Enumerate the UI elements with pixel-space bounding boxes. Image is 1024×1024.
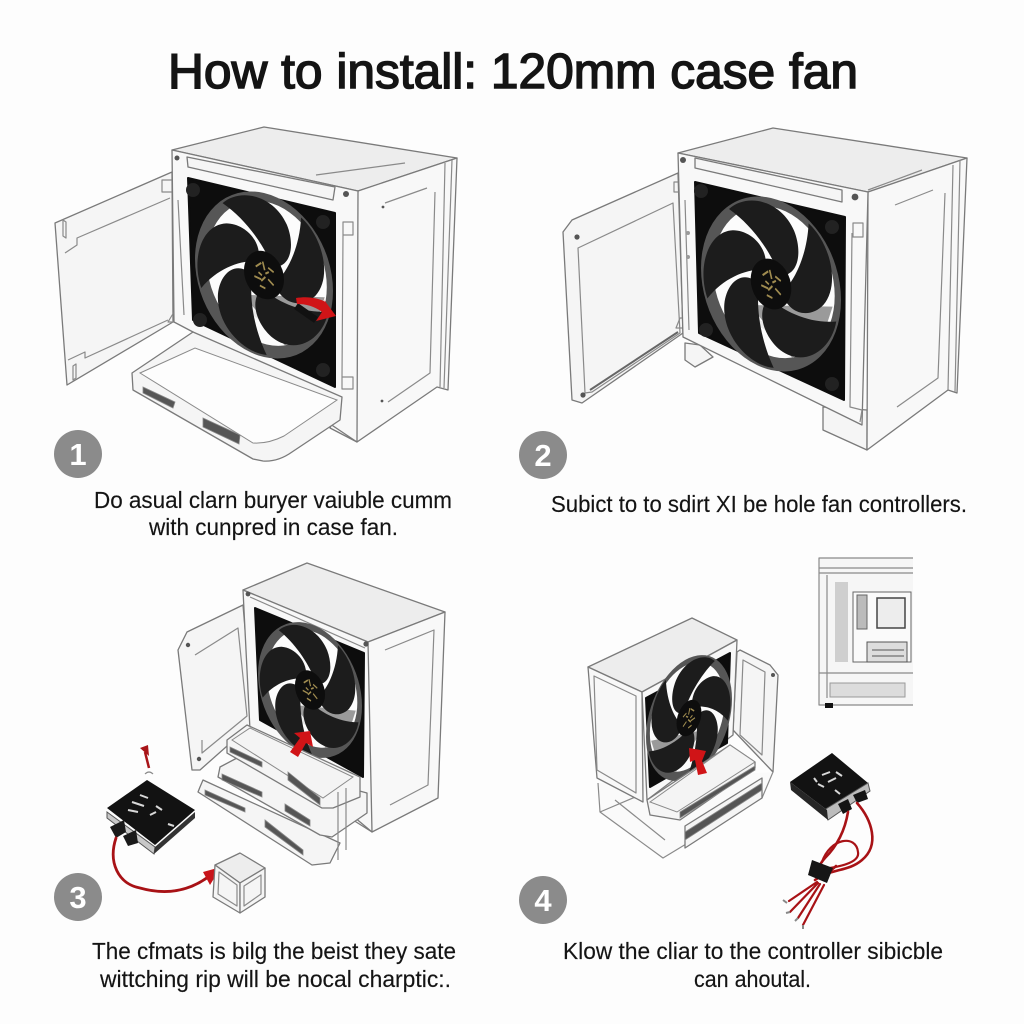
door, step 2 xyxy=(563,173,688,403)
title: How to install: 120mm case fan xyxy=(168,45,858,99)
step 1 caption xyxy=(94,487,452,540)
step 3 caption: wittching rip will be nocal charptic:. xyxy=(99,966,451,992)
step 4 badge: 4 xyxy=(534,883,552,918)
controller module, step 3 xyxy=(107,780,195,854)
step 2 caption: Subict to to sdirt XI be hole fan controllers. xyxy=(551,491,967,517)
step 1 caption: Do asual clarn buryer vaiuble cumm xyxy=(94,487,452,513)
door, step 3 xyxy=(178,605,253,770)
step 4 badge xyxy=(519,876,567,924)
fan, step 1 xyxy=(186,176,335,387)
arrow: cable to cube, step 3 xyxy=(113,838,221,891)
arrow: up from controller, step 3 xyxy=(140,745,153,774)
arrow: red, step 1 xyxy=(296,297,336,321)
case body, step 2 xyxy=(678,128,967,450)
panel: step 1 xyxy=(55,127,457,461)
step 4 caption: Klow the cliar to the controller sibicble xyxy=(563,938,943,964)
controller with cables, step 4 xyxy=(783,753,872,929)
cable clip xyxy=(808,860,833,883)
step 4 caption xyxy=(563,938,943,992)
tray, step 1 xyxy=(132,332,342,461)
step 4 caption: can ahoutal. xyxy=(694,966,811,992)
step 3 caption xyxy=(92,938,456,992)
fan, step 3 xyxy=(254,607,364,780)
step 1 badge: 1 xyxy=(69,437,87,472)
arrow: red, into fan, step 3 xyxy=(290,731,313,757)
drive trays, step 3 xyxy=(198,725,367,865)
fan, step 2 xyxy=(694,181,845,400)
step 3 badge xyxy=(54,873,102,921)
arrow: red, into fan, step 4 xyxy=(689,748,707,775)
step 1 caption: with cunpred in case fan. xyxy=(148,514,398,540)
panel: step 4 xyxy=(588,558,913,929)
cube, step 3 xyxy=(213,853,265,913)
fan, step 4 xyxy=(645,638,735,804)
step 1 badge xyxy=(54,430,102,478)
door, step 4 xyxy=(733,650,778,772)
panel: step 3 xyxy=(107,563,445,913)
case body, step 1 xyxy=(172,127,457,442)
drive trays, step 4 xyxy=(647,745,762,848)
step 2 badge: 2 xyxy=(534,438,552,473)
case body, step 3 xyxy=(243,563,445,832)
step 2 badge xyxy=(519,431,567,479)
step 3 caption: The cfmats is bilg the beist they sate xyxy=(92,938,456,964)
inset: case interior xyxy=(819,558,913,708)
door, step 1 xyxy=(55,172,182,385)
clear lower case, step 4 xyxy=(598,772,773,858)
step 3 badge: 3 xyxy=(69,880,87,915)
case body, step 4 xyxy=(588,618,737,802)
panel: step 2 xyxy=(563,128,967,450)
